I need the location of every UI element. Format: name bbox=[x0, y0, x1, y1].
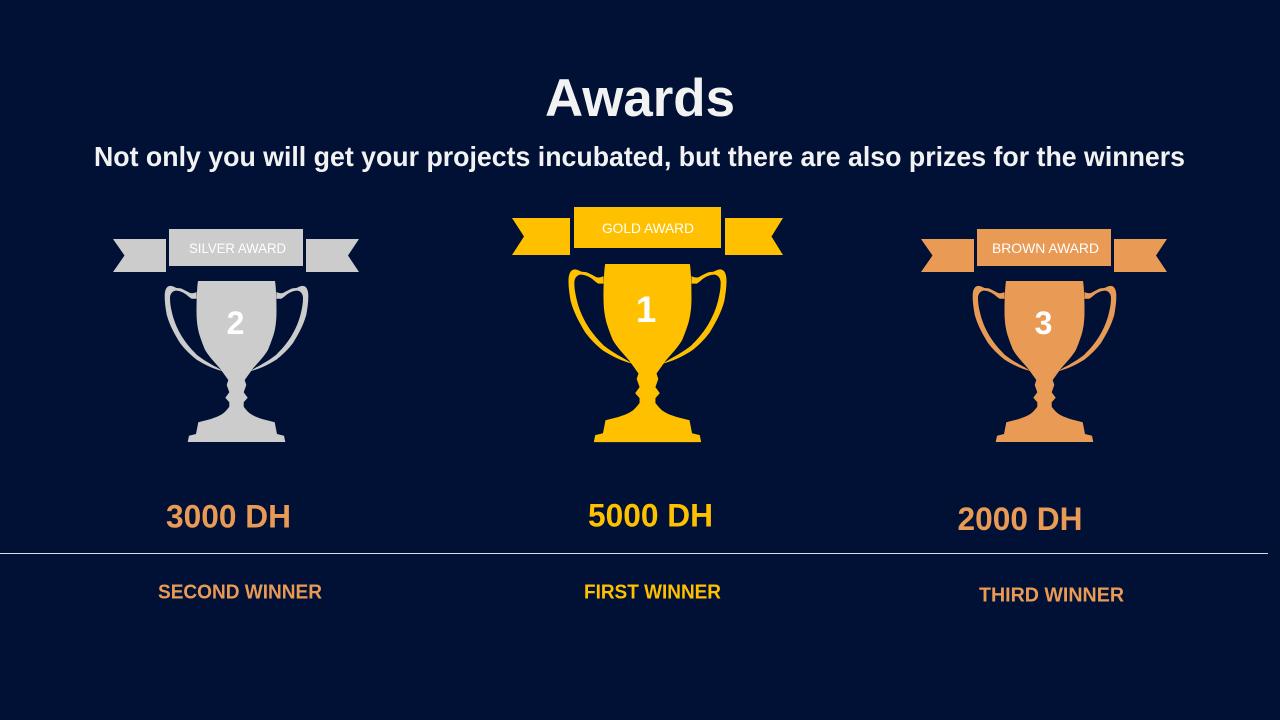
panel: bronze award bbox=[921, 229, 1167, 442]
label: second winner: SECOND WINNER bbox=[158, 582, 323, 604]
icon: bronze trophy bbox=[973, 281, 1116, 442]
subtitle: Not only you will get your projects incubated, but there are also prizes for the winners bbox=[94, 141, 1185, 172]
prize: third: 2000 DH bbox=[958, 501, 1082, 537]
panel: gold award bbox=[512, 207, 783, 442]
panel: silver award bbox=[113, 229, 359, 442]
bronze ribbon label: BROWN AWARD bbox=[992, 240, 1099, 256]
title: Awards bbox=[545, 69, 735, 128]
label: third winner: THIRD WINNER bbox=[979, 584, 1125, 606]
silver ribbon label: SILVER AWARD bbox=[189, 240, 286, 256]
gold ribbon bbox=[512, 207, 783, 255]
gold ribbon label: GOLD AWARD bbox=[602, 220, 694, 236]
gold rank number: 1 bbox=[636, 289, 656, 330]
label: first winner: FIRST WINNER bbox=[584, 582, 722, 604]
prize: second: 3000 DH bbox=[166, 498, 291, 534]
bronze ribbon bbox=[921, 229, 1167, 272]
silver rank number: 2 bbox=[227, 305, 244, 341]
silver ribbon bbox=[113, 229, 359, 272]
bronze rank number: 3 bbox=[1035, 305, 1052, 341]
icon: silver trophy bbox=[165, 281, 308, 442]
prize: first: 5000 DH bbox=[588, 498, 713, 534]
icon: gold trophy bbox=[568, 264, 727, 442]
